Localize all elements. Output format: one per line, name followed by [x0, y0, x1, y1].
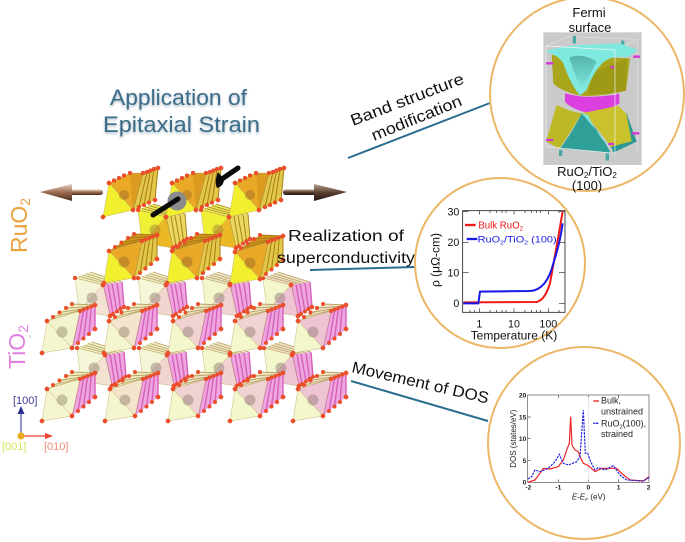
DOS chart: unstrained — [601, 407, 643, 417]
Fermi surface render — [543, 32, 642, 165]
label: TiO2: 2 — [15, 325, 31, 333]
callout: band structure modification: Band structure — [348, 71, 467, 130]
Fermi surface caption: RuO — [557, 164, 584, 179]
resistivity chart: 10 — [447, 267, 459, 279]
DOS chart: (100), — [623, 419, 646, 429]
title: Application of — [110, 85, 248, 110]
crystal axes: [100] — [13, 395, 37, 407]
arrow: right strain — [283, 184, 347, 201]
DOS chart: 2 — [647, 485, 651, 492]
title — [103, 85, 260, 137]
callout: realization of superconductivity: Realization of — [288, 228, 405, 245]
resistivity chart: 2 — [520, 226, 524, 232]
Fermi surface caption — [557, 164, 617, 193]
callout: realization of superconductivity: superconductivity — [277, 250, 415, 267]
title: Epitaxial Strain — [103, 112, 260, 137]
Fermi surface caption: /TiO — [588, 164, 612, 179]
DOS chart: E-E — [572, 493, 586, 502]
panel: Fermi surface — [490, 0, 684, 193]
DOS chart: -1 — [555, 485, 562, 492]
RuO2 layers — [101, 166, 286, 286]
TiO2 layers — [40, 272, 348, 423]
resistivity chart: /TiO — [504, 235, 524, 245]
Fermi surface caption: (100) — [572, 178, 602, 193]
Fermi surface heading — [569, 5, 611, 35]
DOS chart: 2 — [619, 424, 623, 430]
DOS chart: DOS (states/eV) — [509, 409, 518, 468]
Fermi surface heading: surface — [569, 20, 611, 35]
resistivity chart: 2 — [500, 240, 504, 246]
DOS chart: 10 — [519, 436, 527, 443]
resistivity chart: 2 — [524, 240, 528, 246]
DOS chart: 1 — [617, 485, 621, 492]
resistivity chart: 0 — [453, 298, 459, 310]
resistivity chart: RuO — [478, 235, 496, 245]
DOS chart: 0 — [523, 480, 527, 487]
label: RuO2: RuO — [6, 206, 32, 253]
Fermi surface caption: 2 — [584, 171, 589, 180]
DOS chart: 0 — [586, 485, 590, 492]
resistivity chart: 20 — [447, 237, 459, 249]
resistivity chart: Bulk RuO — [478, 221, 520, 232]
resistivity chart: 10 — [508, 318, 520, 330]
DOS chart: F — [585, 497, 589, 503]
resistivity chart: 30 — [447, 206, 459, 218]
Fermi surface heading: Fermi — [572, 5, 606, 20]
callout: movement of DOS: Movement of DOS — [350, 359, 490, 407]
DOS chart: 15 — [519, 414, 527, 421]
label: RuO2: 2 — [17, 198, 33, 206]
crystal axes: [010] — [44, 441, 68, 453]
DOS chart — [509, 392, 651, 503]
callout: band structure modification — [348, 71, 490, 158]
DOS chart: strained — [601, 429, 633, 439]
resistivity chart: 100 — [539, 318, 557, 330]
DOS chart: -2 — [525, 485, 532, 492]
DOS chart: 5 — [523, 458, 527, 465]
strain rods — [153, 168, 238, 215]
label: TiO2: TiO — [4, 333, 30, 369]
crystal structure — [40, 166, 348, 423]
DOS chart: 20 — [519, 392, 527, 399]
panel: resistivity plot — [415, 178, 585, 348]
callout: band structure modification: modification — [369, 93, 465, 145]
DOS chart: RuO — [601, 419, 619, 429]
callout: realization of superconductivity — [277, 228, 415, 270]
resistivity chart — [428, 206, 565, 342]
resistivity chart: ρ (μΩ-cm) — [428, 233, 442, 287]
resistivity chart: (100) — [528, 235, 557, 245]
Fermi surface caption: 2 — [612, 171, 617, 180]
panel: DOS plot — [488, 347, 680, 539]
DOS chart: Bulk, — [601, 396, 621, 406]
DOS chart: (eV) — [588, 493, 606, 502]
resistivity chart: Temperature (K) — [471, 328, 557, 342]
crystal axes: [001] — [2, 441, 26, 453]
arrow: left strain — [40, 184, 103, 201]
resistivity chart: 1 — [476, 318, 482, 330]
crystal axes — [2, 395, 68, 453]
